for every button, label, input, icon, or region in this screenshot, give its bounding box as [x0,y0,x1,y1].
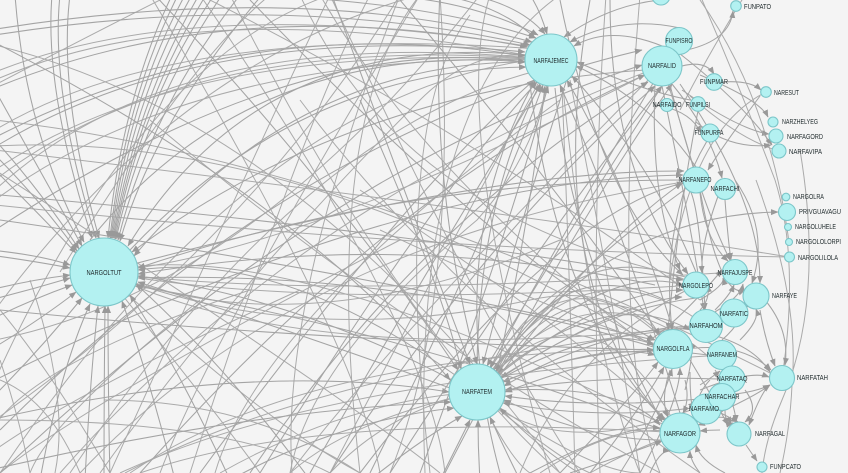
node: NARFATIC [720,299,748,327]
labels: NARGOLFLA [656,346,690,353]
node: top edge [652,0,670,5]
labels: NARFACHI [710,186,740,193]
labels: NARFATAH [797,375,828,382]
node: FUNPMAR [706,74,722,90]
node: NARFACHAR [708,384,736,410]
labels: NARGOLRA [793,194,824,201]
node: NARFATAH [770,366,794,390]
labels: NARFALID [648,63,676,70]
labels: NARFAJEMEC [534,58,568,65]
labels: NARGOLEPO [679,283,713,290]
node: NARFAHOM [690,310,722,342]
labels: NARFATAQ [716,376,748,383]
node: NARGOLFLA [654,330,692,368]
node: NARFATAQ [719,366,745,392]
node: NARFAMO [691,394,721,424]
labels: NARGOLTUT [86,270,122,277]
node: PRIVGUAVAGU [778,204,796,220]
labels: NARFAMO [689,406,719,413]
node: NARFALID [642,46,682,86]
labels: NARFACHAR [704,394,740,401]
labels: PRIVGUAVAGU [799,209,841,216]
node: NARFANEFO [683,167,709,193]
labels: FUNPURFA [694,130,724,137]
node: NARZHELYEG [768,117,778,127]
node: NARFACHI [714,178,736,200]
labels: NARFATIC [720,311,748,318]
labels: NARFATEM [462,389,492,396]
labels: FUNPMAR [700,79,728,86]
node: NARGOLOLORPI [786,238,792,246]
labels: NARFAGORD [787,134,823,141]
node: FUNPATO [731,1,741,11]
node: NARGOLUHELE [784,224,792,230]
node: NARESUT [761,87,771,97]
node: NARFATEM [449,364,505,420]
node: NARFAGAL [727,422,751,446]
node: FUNPURFA [701,124,719,142]
node: NARFAYE [743,283,769,309]
labels: NARFAVIPA [789,149,822,156]
labels: FUNPISRO [666,38,693,45]
node: NARFAIDO [660,98,674,112]
labels: FUNPILSI [686,102,710,109]
labels: NARFAHOM [690,323,723,330]
node: NARFAGOR [660,413,700,453]
labels: NARFAGAL [755,431,785,438]
node: NARGOLRA [782,193,790,201]
node: NARGOLEPO [683,272,709,298]
labels: NARFAIDO [652,102,682,109]
labels: NARZHELYEG [782,119,818,126]
labels: NARFAJUSPE [718,270,753,277]
labels: FUNPCATO [770,464,801,471]
node: FUNPCATO [757,462,767,472]
node: NARFAGORD [769,129,783,143]
labels: NARFAGOR [664,431,696,438]
node: NARFAJEMEC [525,34,577,86]
node: FUNPISRO [666,28,692,54]
labels: FUNPATO [744,4,771,11]
labels: NARFAYE [772,293,797,300]
labels: NARGOLUHELE [795,224,836,231]
node: NARFANEM [708,340,736,370]
node: NARGOLILOLA [784,252,794,262]
node: NARFAVIPA [772,144,786,158]
labels: NARFANEFO [678,177,712,184]
node: FUNPILSI [691,97,705,111]
node: NARFAJUSPE [722,260,748,284]
labels: NARFANEM [707,352,737,359]
labels: NARESUT [774,90,800,97]
labels: NARGOLILOLA [798,255,838,262]
node: NARGOLTUT [70,238,138,306]
